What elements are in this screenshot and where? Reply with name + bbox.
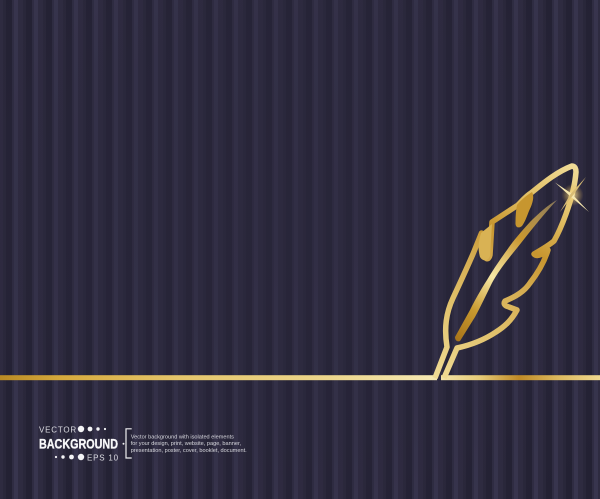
description text (131, 434, 247, 454)
icon: sparkle star (555, 177, 589, 212)
dots row bottom (55, 454, 84, 460)
gold horizontal baseline right (441, 375, 600, 380)
label: eps 10: EPS 10 (87, 454, 119, 462)
gold horizontal baseline left (0, 375, 437, 380)
icon: gold feather outline (435, 166, 576, 378)
bracket (122, 429, 132, 458)
upper notch fill (515, 192, 533, 227)
description text: for your design, print, website, page, banner, (131, 441, 242, 447)
description text: presentation, poster, cover, booklet, document. (131, 448, 247, 454)
middle notch fill (479, 224, 492, 260)
dots row top (78, 426, 106, 432)
label: vector: VECTOR (39, 426, 77, 434)
quill centre stroke (455, 200, 557, 341)
label: background: BACKGROUND (39, 436, 118, 452)
description text: Vector background with isolated elements (131, 434, 234, 440)
